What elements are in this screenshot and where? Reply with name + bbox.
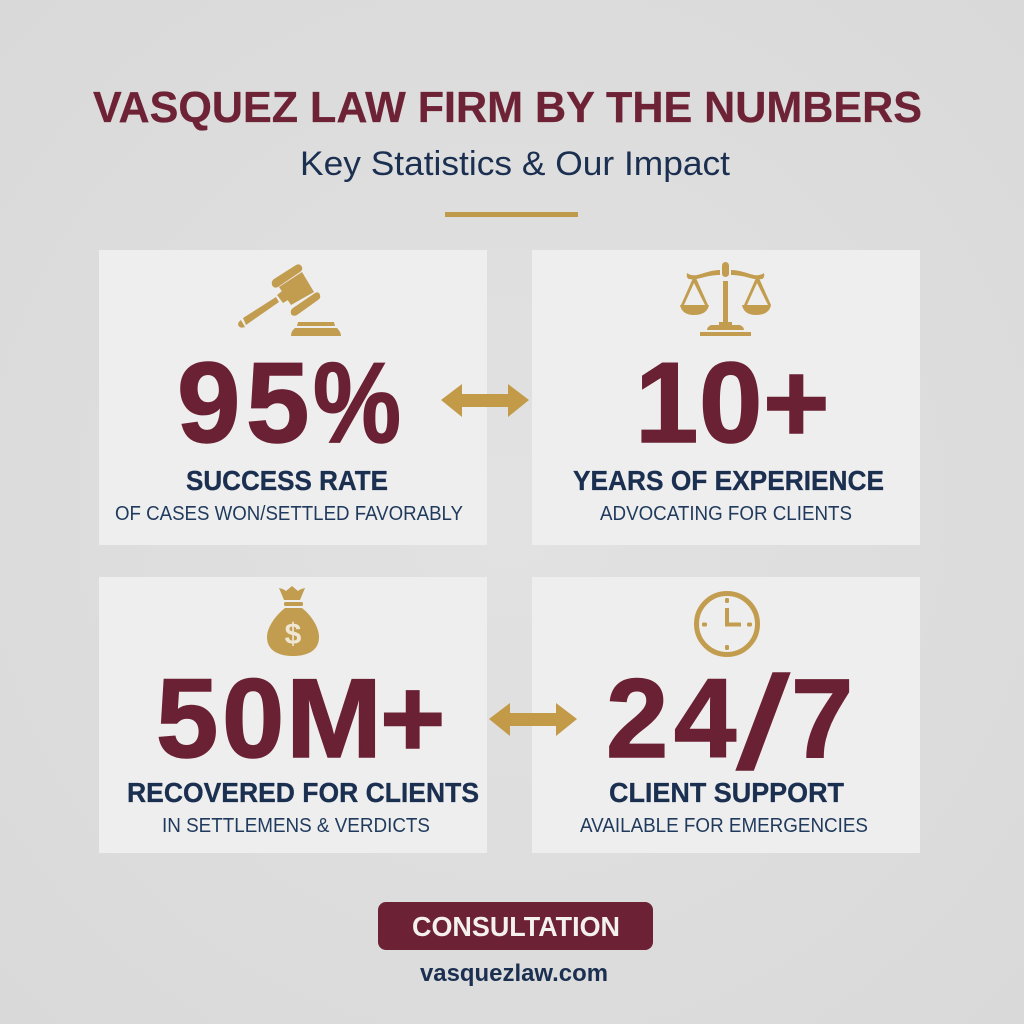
big number: 24/7: 7 (791, 656, 853, 781)
panel: support (532, 577, 920, 853)
label: experience: YEARS OF EXPERIENCE (573, 465, 884, 496)
panel: experience (532, 250, 920, 545)
title: VASQUEZ LAW FIRM BY THE NUMBERS (93, 83, 922, 132)
big number: 50M+: M (286, 656, 382, 781)
big number: 50M+: + (380, 656, 445, 781)
big number: 24/7: 4 (674, 656, 736, 781)
icon: money bag (267, 586, 319, 656)
caption: success rate: OF CASES WON/SETTLED FAVORABLY (115, 503, 463, 525)
title rule (445, 212, 578, 217)
label: support: CLIENT SUPPORT (609, 777, 844, 808)
big number: 95%: 9 (177, 340, 240, 467)
big number: 50M+: 0 (222, 656, 284, 781)
label: success rate: SUCCESS RATE (186, 465, 388, 496)
button: consultation: CONSULTATION (412, 911, 620, 942)
panel: recovered (99, 577, 487, 853)
big number: 24/7: / (738, 650, 789, 796)
website: vasquezlaw.com (420, 960, 608, 987)
icon: money bag: $ (285, 618, 302, 651)
subtitle: Key Statistics & Our Impact (300, 145, 731, 183)
arrow: top double arrow (441, 384, 529, 417)
big number: 95%: 5 (246, 340, 309, 467)
big number: 95%: % (313, 340, 401, 467)
label: recovered: RECOVERED FOR CLIENTS (127, 777, 479, 808)
big number: 50M+: 5 (156, 656, 218, 781)
icon: gavel (238, 264, 341, 336)
big number: 10+: 1 (635, 340, 698, 467)
big number: 10+: + (763, 340, 830, 467)
button: consultation (378, 902, 653, 950)
big number: 24/7: 2 (606, 656, 668, 781)
caption: experience: ADVOCATING FOR CLIENTS (600, 503, 852, 525)
arrow: bottom double arrow (489, 703, 577, 736)
icon: scales (680, 262, 771, 336)
icon: clock (696, 594, 758, 654)
caption: support: AVAILABLE FOR EMERGENCIES (580, 815, 868, 837)
caption: recovered: IN SETTLEMENS & VERDICTS (162, 815, 430, 837)
big number: 10+: 0 (699, 340, 762, 467)
panel: success rate (99, 250, 487, 545)
